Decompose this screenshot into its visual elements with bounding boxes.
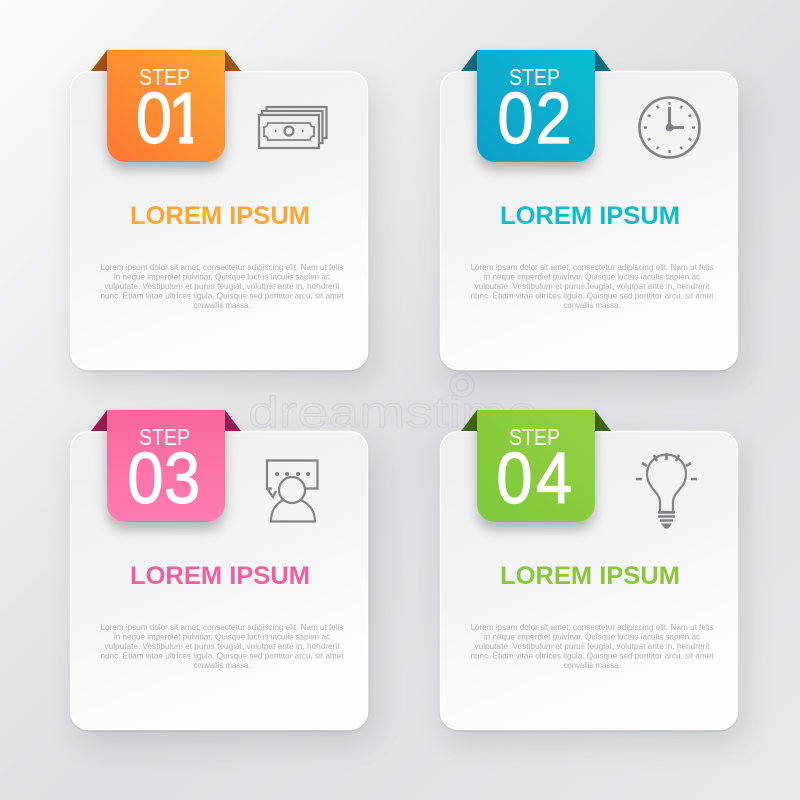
text block 02: nunc. Etiam vitae ultrices ligula. Quisque sed porttitor arcu, sit amet — [470, 290, 714, 300]
ribbon folds 03 — [91, 410, 241, 431]
text block 04: nunc. Etiam vitae ultrices ligula. Quisque sed porttitor arcu, sit amet — [470, 650, 714, 660]
text block 01 — [100, 262, 344, 310]
number 01: 01 — [136, 78, 204, 159]
step label 03: STEP — [139, 424, 190, 450]
text block 03: nunc. Etiam vitae ultrices ligula. Quisque sed porttitor arcu, sit amet — [100, 650, 344, 660]
text block 01: convallis massa. — [194, 300, 250, 310]
text block 03 — [100, 622, 344, 670]
step label 02: STEP — [509, 64, 560, 90]
number 04: 04 — [496, 438, 572, 519]
panel: step 04 — [440, 410, 738, 730]
number 02: 02 — [498, 78, 572, 159]
title 04: LOREM IPSUM — [500, 562, 680, 590]
text block 04: Lorem ipsum dolor sit amet, consectetur adipiscing elit. Nam ut felis — [470, 622, 714, 632]
text block 03: vulputate. Vestibulum et purus feugiat, volutpat ante in, hendrerit — [104, 641, 340, 651]
step label 01: STEP — [139, 64, 190, 90]
ribbon folds 02 — [461, 50, 611, 71]
text block 04: vulputate. Vestibulum et purus feugiat, volutpat ante in, hendrerit — [474, 641, 710, 651]
text block 02: vulputate. Vestibulum et purus feugiat, volutpat ante in, hendrerit — [474, 281, 710, 291]
text block 02: convallis massa. — [564, 300, 620, 310]
ribbon 04 — [477, 410, 595, 522]
icon: clock — [640, 98, 700, 158]
card 03 — [70, 432, 368, 730]
text block 01: nunc. Etiam vitae ultrices ligula. Quisque sed porttitor arcu, sit amet — [100, 290, 344, 300]
ribbon 01 — [107, 50, 225, 162]
panel: step 02 — [440, 50, 738, 370]
watermark: dreamstime — [248, 388, 538, 437]
text block 03: in neque imperdiet pulvinar. Quisque luctus iaculis sapien ac — [114, 632, 330, 642]
text block 04: in neque imperdiet pulvinar. Quisque luctus iaculis sapien ac — [484, 632, 700, 642]
card 02 — [440, 72, 738, 370]
text block 01: in neque imperdiet pulvinar. Quisque luctus iaculis sapien ac — [114, 272, 330, 282]
card 01 — [70, 72, 368, 370]
icon: speaking person — [267, 460, 318, 522]
ribbon 03 — [107, 410, 225, 522]
panel: step 01 — [70, 50, 368, 370]
title 01: LOREM IPSUM — [130, 202, 310, 230]
number 03: 03 — [127, 438, 200, 519]
step label 04: STEP — [509, 424, 560, 450]
icon: light bulb — [636, 453, 697, 528]
card 04 — [440, 432, 738, 730]
text block 01: vulputate. Vestibulum et purus feugiat, volutpat ante in, hendrerit — [104, 281, 340, 291]
text block 04 — [470, 622, 714, 670]
watermark — [248, 373, 538, 437]
text block 03: convallis massa. — [194, 660, 250, 670]
title 03: LOREM IPSUM — [130, 562, 310, 590]
ribbon 02 — [477, 50, 595, 162]
text block 04: convallis massa. — [564, 660, 620, 670]
text block 03: Lorem ipsum dolor sit amet, consectetur adipiscing elit. Nam ut felis — [100, 622, 344, 632]
title 02: LOREM IPSUM — [500, 202, 680, 230]
text block 02 — [470, 262, 714, 310]
text block 02: Lorem ipsum dolor sit amet, consectetur adipiscing elit. Nam ut felis — [470, 262, 714, 272]
icon: banknotes — [259, 107, 326, 148]
text block 02: in neque imperdiet pulvinar. Quisque luctus iaculis sapien ac — [484, 272, 700, 282]
text block 01: Lorem ipsum dolor sit amet, consectetur adipiscing elit. Nam ut felis — [100, 262, 344, 272]
panel: step 03 — [70, 410, 368, 730]
ribbon folds 04 — [461, 410, 611, 431]
ribbon folds 01 — [91, 50, 241, 71]
